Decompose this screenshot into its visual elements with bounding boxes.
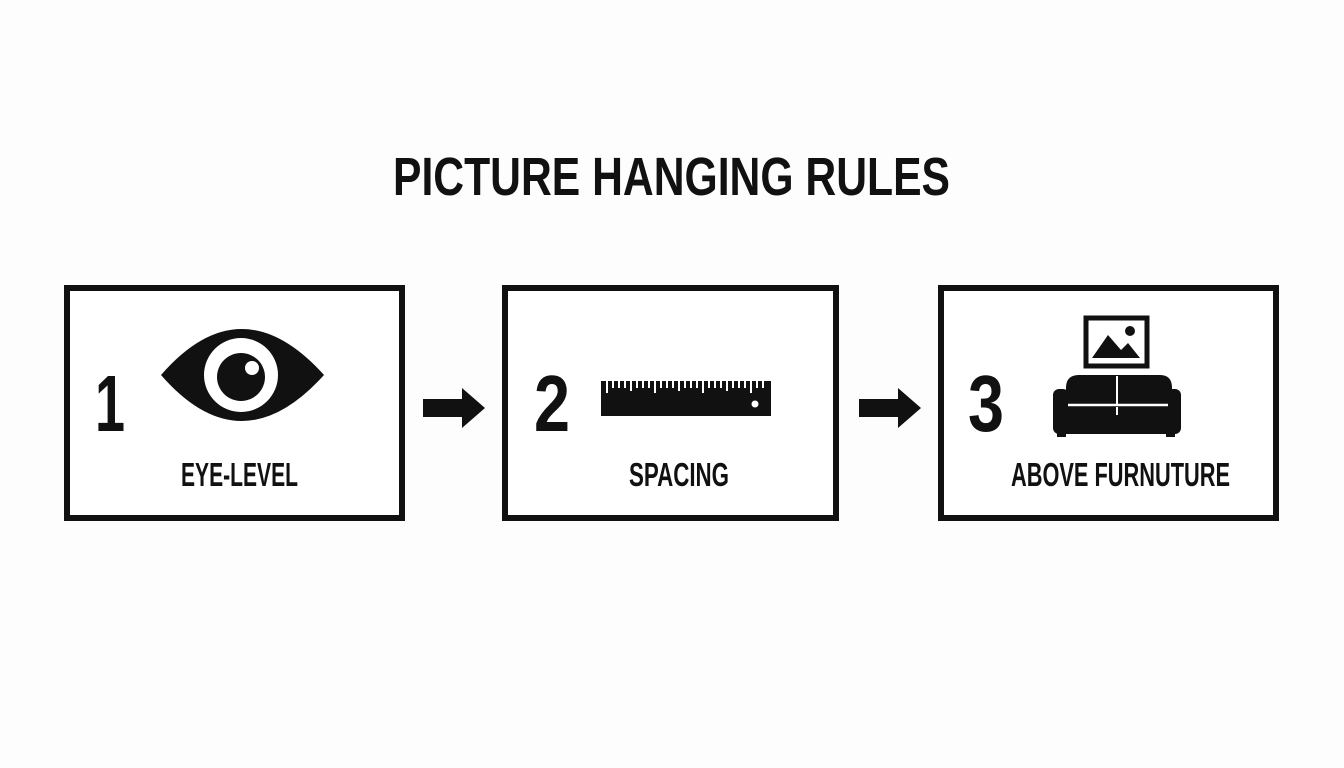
icon: eye: [161, 329, 324, 421]
number 3: 3: [968, 359, 1004, 448]
arrow 1: [423, 388, 485, 428]
arrow 2: [859, 388, 921, 428]
panel: above furniture: [941, 288, 1276, 518]
title: PICTURE HANGING RULES: [393, 147, 950, 207]
icon: picture above sofa: [1053, 318, 1181, 437]
panel: spacing: [505, 288, 836, 518]
icon: ruler: [601, 381, 771, 416]
panel: eye-level: [67, 288, 402, 518]
label: spacing: SPACING: [629, 456, 729, 493]
number 1: 1: [95, 359, 125, 448]
label: eye-level: EYE-LEVEL: [181, 456, 298, 493]
number 2: 2: [534, 359, 570, 448]
label: above furniture: ABOVE FURNUTURE: [1011, 456, 1230, 493]
